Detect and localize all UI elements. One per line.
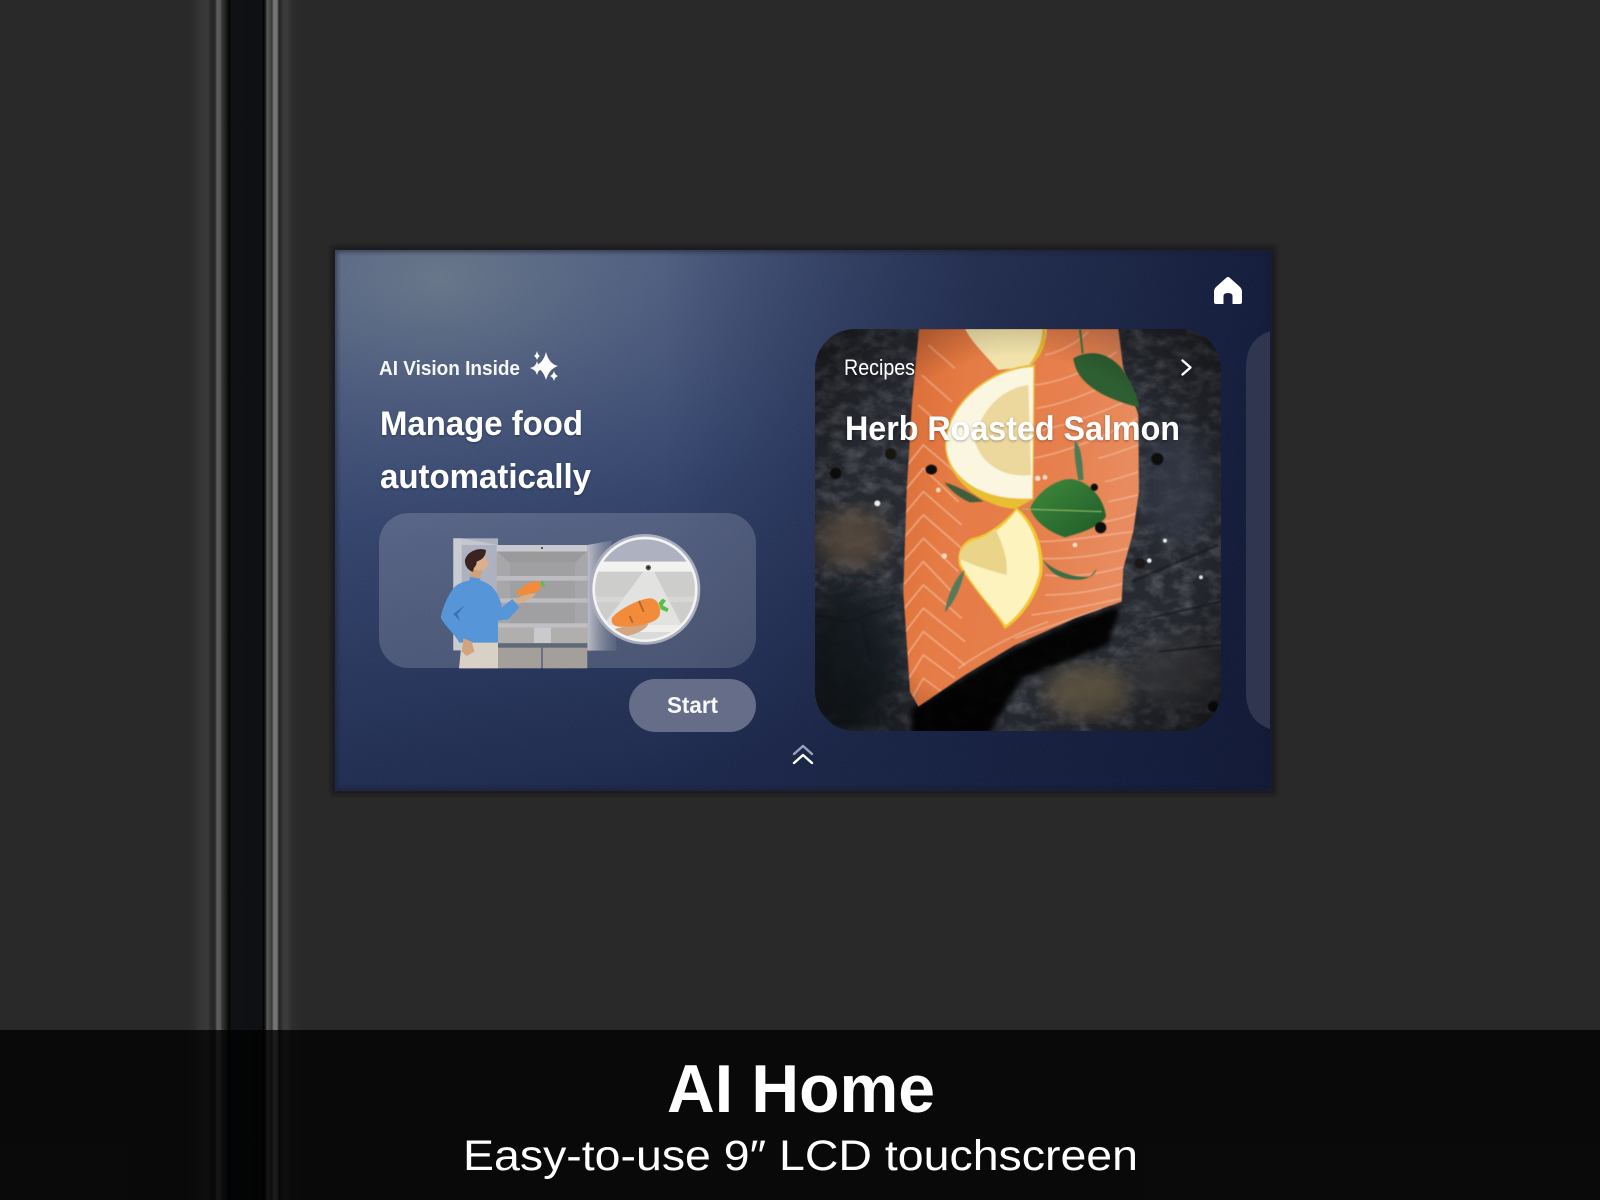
icon: chevron right bbox=[1182, 360, 1190, 374]
screen shadow frame bbox=[332, 247, 1275, 794]
peppercorns and salt bbox=[830, 448, 1219, 712]
magnifier: camera view of carrot bbox=[590, 534, 700, 652]
illustration: person at fridge bbox=[441, 538, 617, 668]
button: Start bbox=[629, 679, 756, 732]
recipe card: salmon photo bbox=[802, 329, 1222, 735]
caption subtitle: Easy-to-use 9″ LCD touchscreen bbox=[463, 1132, 1138, 1180]
fridge left door bbox=[453, 538, 498, 650]
card label: Recipes: Recipes bbox=[844, 355, 915, 380]
salmon fillet bbox=[903, 329, 1139, 707]
lemon slices bbox=[945, 329, 1047, 629]
touchscreen bbox=[335, 250, 1272, 791]
icon: swipe-up double chevron bbox=[794, 746, 812, 763]
door handle rails bbox=[190, 0, 300, 1200]
label: AI Vision Inside with sparkle icon bbox=[379, 351, 558, 381]
person bbox=[441, 549, 536, 668]
slate surface bbox=[802, 329, 1222, 735]
button: Start: Start bbox=[667, 692, 718, 718]
screen background bbox=[335, 250, 1272, 791]
heading: Manage food automatically: automatically bbox=[380, 458, 591, 496]
caption band bbox=[0, 1030, 1600, 1200]
carrot in hand bbox=[517, 581, 546, 595]
fridge interior bbox=[497, 545, 587, 668]
icon: AI sparkles bbox=[530, 351, 558, 381]
icon: home bbox=[1214, 277, 1242, 304]
card title: Herb Roasted Salmon: Herb Roasted Salmon bbox=[845, 410, 1180, 448]
fridge right door bbox=[587, 541, 617, 651]
heading: Manage food automatically: Manage food bbox=[380, 405, 583, 443]
caption title: AI Home: AI Home bbox=[667, 1051, 935, 1127]
panel: illustration card bbox=[379, 513, 756, 668]
next card peeking at right edge bbox=[1246, 331, 1270, 729]
herbs bbox=[944, 329, 1140, 612]
heading: Manage food automatically bbox=[380, 405, 591, 496]
photo vignette bbox=[815, 329, 1221, 731]
label: AI Vision Inside with sparkle icon: AI Vision Inside bbox=[379, 357, 520, 380]
